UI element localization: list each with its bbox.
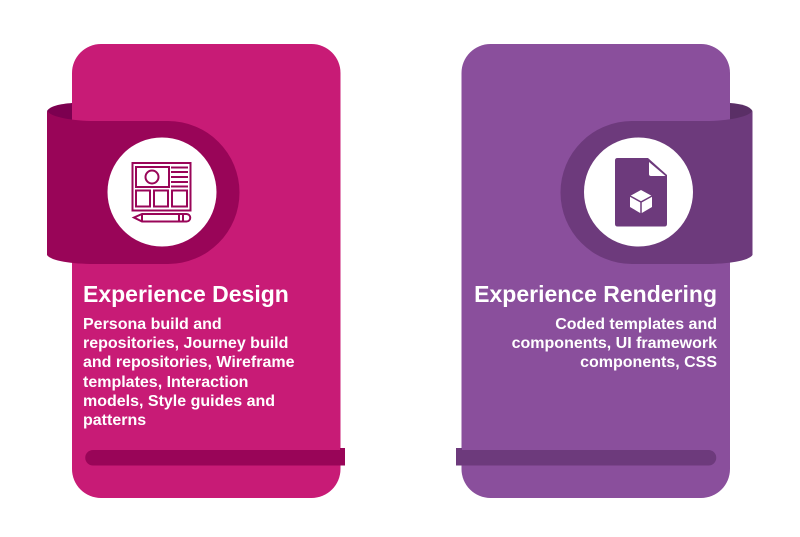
icon circle [108, 138, 216, 246]
heading: Experience Rendering [474, 281, 717, 307]
cube [630, 190, 652, 214]
ribbon fold shadow [730, 103, 752, 120]
cube edges [630, 196, 652, 214]
icon: document with cube [615, 158, 667, 226]
bottom bar [456, 450, 716, 466]
icon circle [584, 138, 693, 246]
page fold [649, 162, 666, 176]
body text: components, UI framework [512, 335, 717, 352]
body text: models, Style guides and [83, 393, 275, 410]
body text: repositories, Journey build [83, 335, 288, 352]
ribbon band [47, 111, 240, 264]
bottom bar tab [456, 448, 462, 452]
ribbon band [560, 111, 752, 264]
body text: templates, Interaction [83, 374, 248, 391]
body text: and repositories, Wireframe [83, 354, 295, 371]
body text: Coded templates and [555, 316, 717, 333]
card background [72, 44, 340, 498]
card background [462, 44, 730, 498]
bottom bar tab [340, 448, 345, 452]
panel: experience design [47, 44, 345, 498]
body text: patterns [83, 412, 146, 429]
body text: components, CSS [580, 354, 717, 371]
bottom bar [85, 450, 345, 466]
heading: Experience Design [83, 281, 289, 307]
panel: experience rendering [456, 44, 752, 498]
body text: Persona build and [83, 316, 222, 333]
ribbon fold shadow [47, 103, 72, 120]
document [615, 158, 667, 226]
icon: wireframe and pencil [132, 163, 190, 222]
